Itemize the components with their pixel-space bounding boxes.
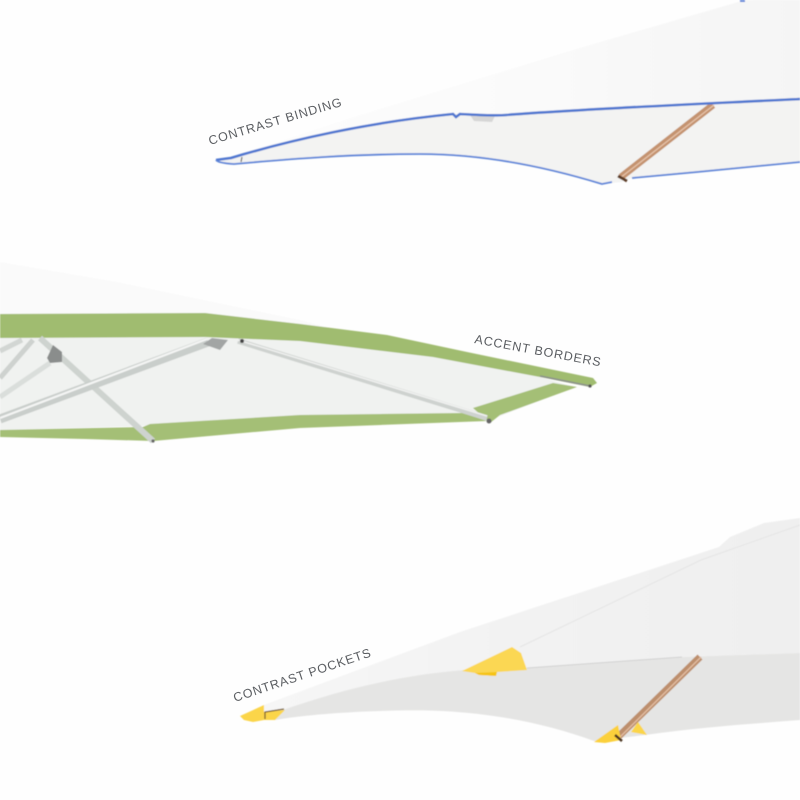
bracket bbox=[470, 115, 495, 122]
green top band bbox=[0, 313, 597, 387]
underside bbox=[0, 337, 575, 430]
wooden pole bbox=[619, 657, 700, 736]
green lower band bbox=[0, 413, 487, 441]
brackets bbox=[203, 338, 228, 350]
upper canopy bbox=[0, 262, 330, 328]
label: contrast pockets: CONTRAST POCKETS bbox=[232, 646, 373, 705]
yellow pockets bbox=[462, 647, 527, 676]
wooden pole bbox=[621, 105, 713, 177]
umbrella: accent borders (green) bbox=[0, 262, 597, 443]
seam bbox=[520, 525, 800, 647]
frame struts bbox=[0, 338, 590, 441]
underside bbox=[216, 99, 800, 184]
umbrella: contrast binding (blue) bbox=[216, 0, 800, 184]
blue binding bbox=[216, 99, 800, 160]
underside bbox=[264, 653, 800, 741]
label: accent borders: ACCENT BORDERS bbox=[473, 332, 602, 369]
label: contrast binding: CONTRAST BINDING bbox=[207, 95, 343, 148]
upper canopy bbox=[240, 518, 800, 716]
upper canopy bbox=[216, 0, 800, 160]
umbrella: contrast pockets (yellow) bbox=[240, 518, 800, 743]
